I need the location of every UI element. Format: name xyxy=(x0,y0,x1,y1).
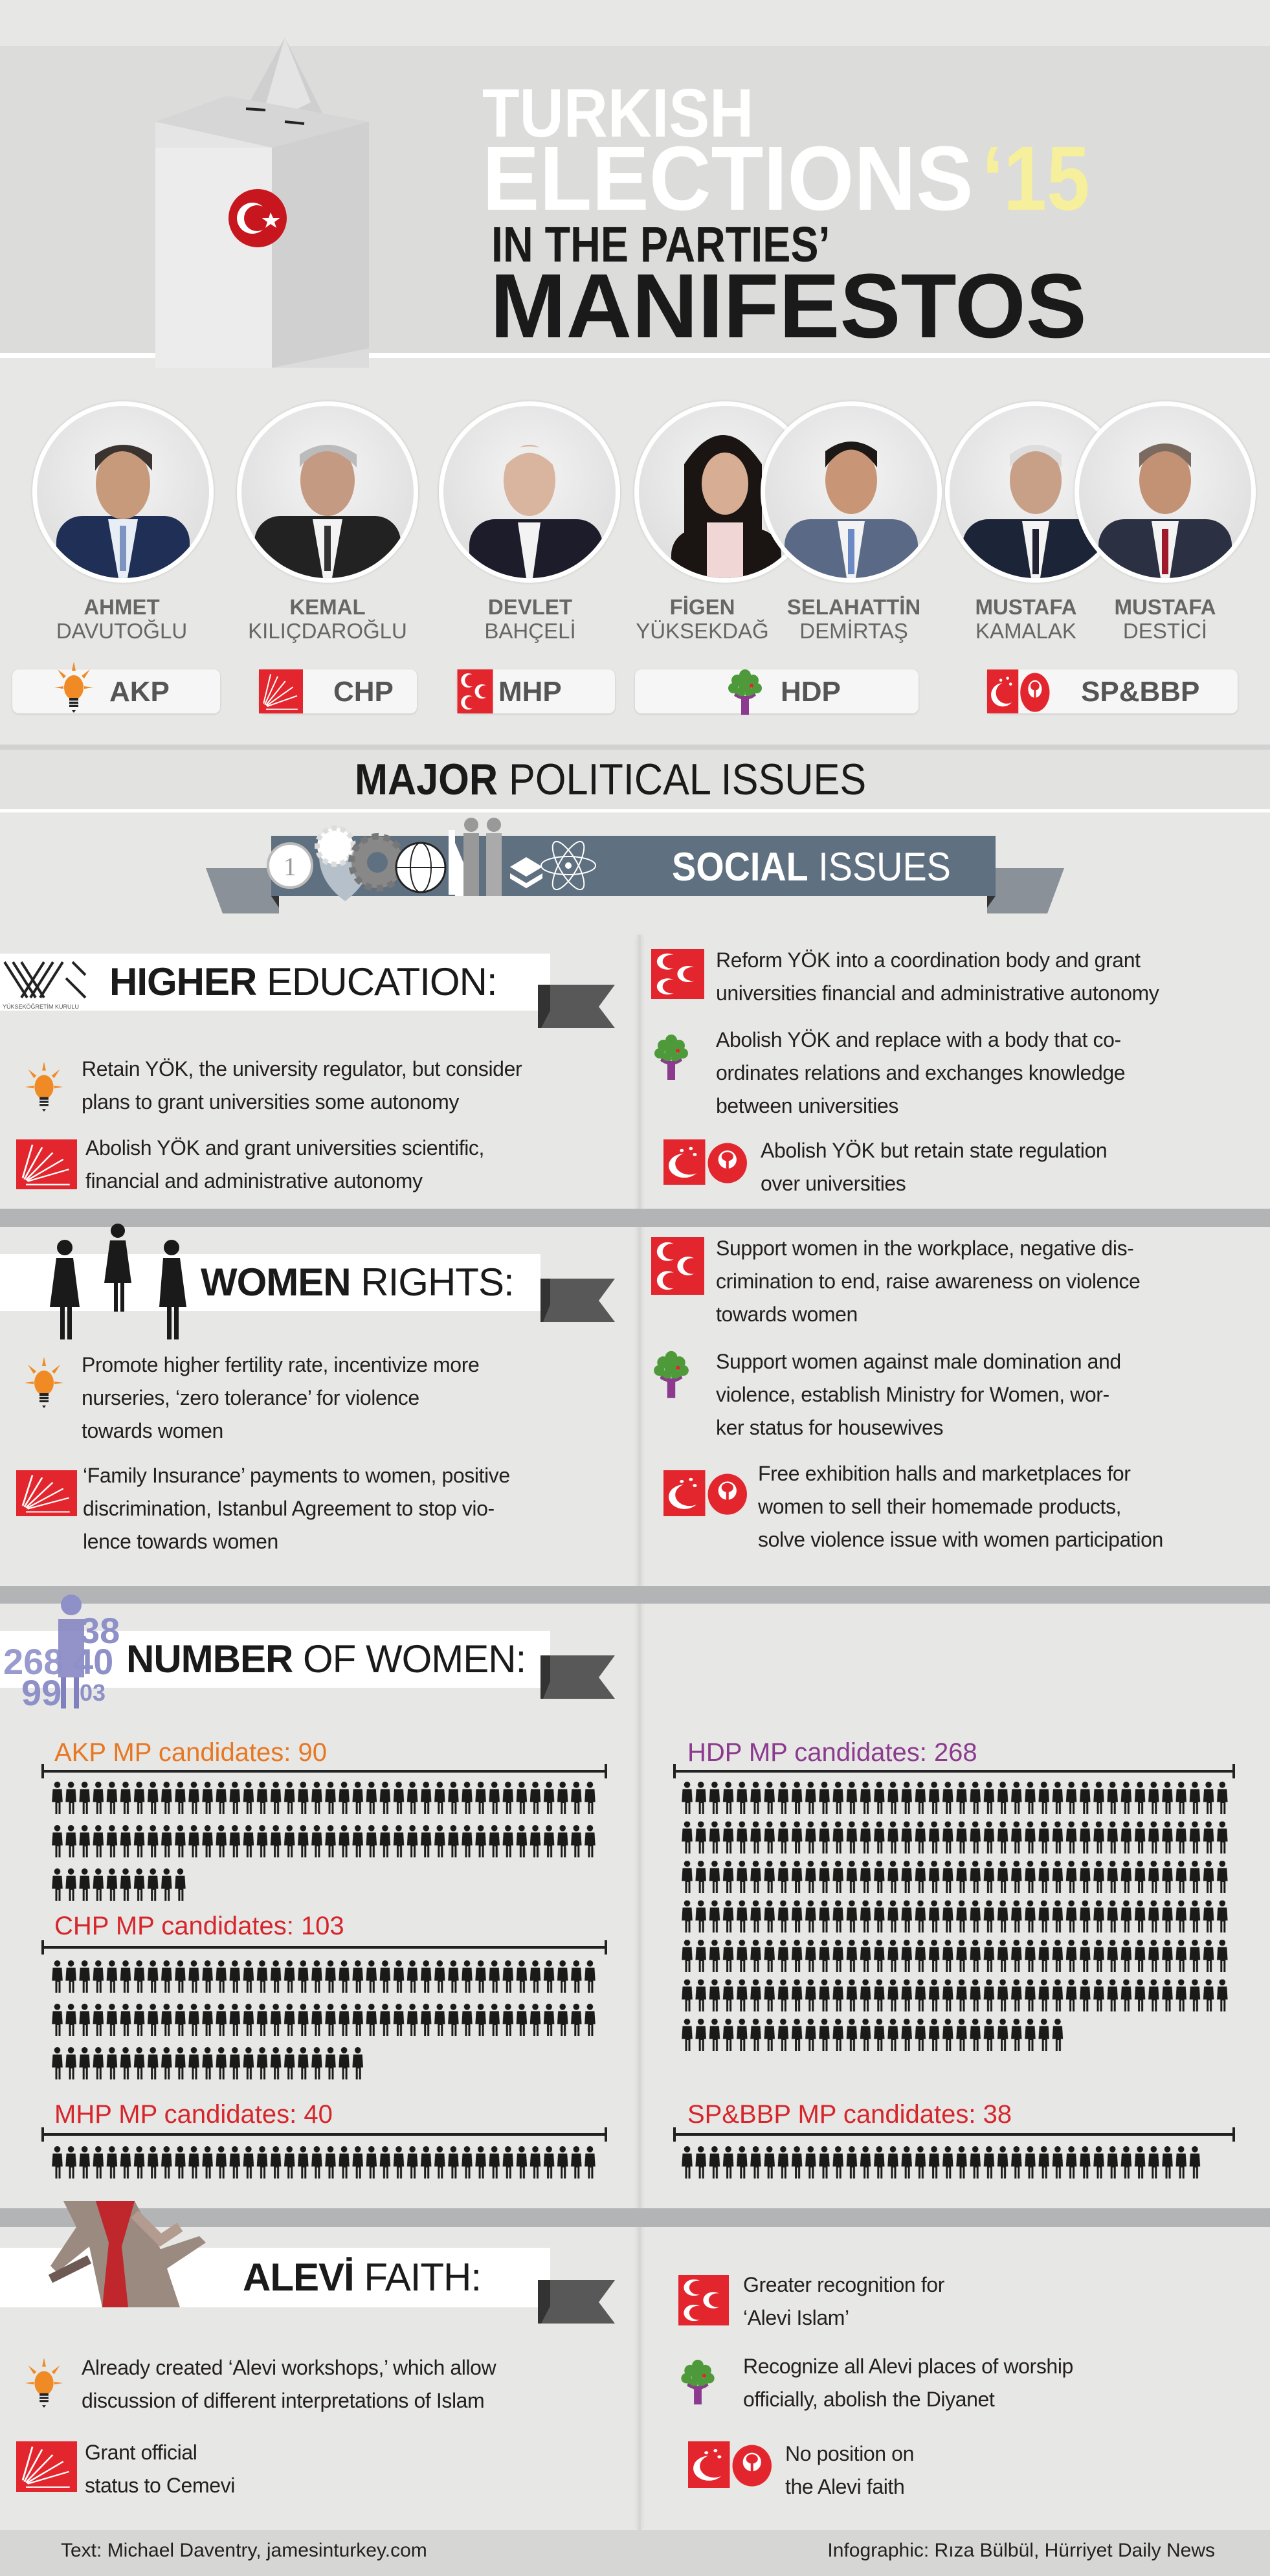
panel: number of women xyxy=(0,1595,615,1713)
item: SP&BBP: over universities xyxy=(761,1172,906,1195)
item: AKP: plans to grant universities some autonomy xyxy=(82,1090,459,1114)
item: CHP xyxy=(16,1464,510,1553)
credit: infographic: Infographic: Rıza Bülbül, Hürriyet Daily News xyxy=(827,2540,1215,2561)
candidate photos xyxy=(32,401,214,583)
candidate names: DAVUTOĞLU xyxy=(56,619,187,643)
icon: numbers figure: 40 xyxy=(73,1641,113,1682)
chart: HDP 268: HDP MP candidates: 268 xyxy=(687,1738,977,1767)
label: MHP xyxy=(457,669,615,713)
item: HDP: between universities xyxy=(716,1094,898,1117)
chart: AKP 90 xyxy=(41,1738,607,1901)
item: HDP xyxy=(654,1350,1121,1439)
item: MHP xyxy=(651,948,1159,1005)
icon: numbers figure: 268 xyxy=(3,1641,63,1682)
panel: candidates: BAHÇELİ xyxy=(484,619,576,643)
candidate names: AHMET xyxy=(84,595,160,619)
item: HDP: ker status for housewives xyxy=(716,1416,943,1439)
panel: candidates: DESTİCİ xyxy=(1123,619,1207,643)
item: CHP: Abolish YÖK and grant universities scientific, xyxy=(85,1136,484,1159)
panel: women rights xyxy=(0,1224,1163,1553)
item: MHP: ‘Alevi Islam’ xyxy=(743,2306,849,2329)
icon: numbers figure: 03 xyxy=(80,1679,106,1706)
item: CHP: financial and administrative autonomy xyxy=(85,1169,423,1193)
item: CHP xyxy=(16,1136,484,1193)
panel: candidates: MUSTAFA xyxy=(1114,595,1216,619)
divider xyxy=(0,1209,1270,1227)
credit: text: Text: Michael Daventry, jamesinturkey.com xyxy=(61,2540,427,2561)
label: HDP xyxy=(635,669,919,713)
item: AKP: nurseries, ‘zero tolerance’ for violence xyxy=(82,1386,419,1409)
icon: YÖK logo: YÜKSEKÖĞRETİM KURULU xyxy=(3,1003,79,1010)
panel: candidates: FİGEN xyxy=(670,595,735,619)
panel: alevi faith xyxy=(0,2201,1073,2498)
chart: MHP 40 xyxy=(41,2100,607,2178)
header: number of women xyxy=(0,1631,550,1688)
item: MHP xyxy=(678,2273,944,2329)
header: higher education xyxy=(0,954,550,1011)
icon: women figures xyxy=(50,1224,186,1339)
item: CHP: discrimination, Istanbul Agreement to stop vio- xyxy=(83,1497,495,1520)
title: ELECTIONS xyxy=(482,127,973,229)
icon: ballot box xyxy=(155,38,369,368)
item: MHP: Reform YÖK into a coordination body and grant xyxy=(716,948,1141,972)
chart: HDP 268 xyxy=(673,1738,1235,2051)
label: SP&BBP xyxy=(987,669,1238,713)
footer xyxy=(0,2530,1270,2576)
item: AKP: Already created ‘Alevi workshops,’ which allow xyxy=(82,2356,496,2379)
item: SP&BBP: Free exhibition halls and marketplaces for xyxy=(758,1462,1130,1485)
panel: candidates: DEMİRTAŞ xyxy=(799,619,908,643)
item: HDP xyxy=(654,1028,1125,1117)
chart: SP&BBP 38: SP&BBP MP candidates: 38 xyxy=(687,2100,1012,2129)
label: HDP: HDP xyxy=(781,676,841,708)
item: SP&BBP xyxy=(663,1462,1163,1551)
panel: candidates: DEVLET xyxy=(488,595,572,619)
item: CHP: Grant official xyxy=(85,2441,197,2464)
item: SP&BBP: Abolish YÖK but retain state regulation xyxy=(761,1139,1107,1162)
item: MHP: universities financial and administrative autonomy xyxy=(716,981,1159,1005)
chart: SP&BBP 38 xyxy=(673,2100,1235,2178)
item: HDP xyxy=(681,2355,1073,2411)
item: SP&BBP: No position on xyxy=(785,2442,914,2465)
header: higher education: HIGHER EDUCATION: xyxy=(109,960,497,1003)
title xyxy=(482,75,1090,357)
label: AKP: AKP xyxy=(109,676,170,708)
panel: candidates: KEMAL xyxy=(289,595,366,619)
chart: AKP 90: AKP MP candidates: 90 xyxy=(54,1738,327,1767)
chart: MHP 40: MHP MP candidates: 40 xyxy=(54,2100,333,2129)
header background xyxy=(0,46,1270,353)
item: CHP xyxy=(16,2441,235,2497)
item: AKP: discussion of different interpretations of Islam xyxy=(82,2389,484,2412)
ribbon: social issues xyxy=(206,818,1064,913)
item: AKP xyxy=(25,2356,496,2412)
item: AKP: Retain YÖK, the university regulator, but consider xyxy=(82,1057,522,1081)
heading: major political issues: MAJOR POLITICAL ISSUES xyxy=(355,755,866,804)
divider xyxy=(0,2208,1270,2227)
item: SP&BBP: solve violence issue with women participation xyxy=(758,1528,1163,1551)
ribbon: social issues: SOCIAL ISSUES xyxy=(672,845,951,890)
icon: numbers figure: 99 xyxy=(21,1672,61,1713)
item: HDP: violence, establish Ministry for Women, wor- xyxy=(716,1383,1109,1406)
panel: candidates: KILIÇDAROĞLU xyxy=(248,619,407,643)
chart: CHP 103: CHP MP candidates: 103 xyxy=(54,1912,344,1940)
item: MHP: crimination to end, raise awareness on violence xyxy=(716,1270,1140,1293)
chart: CHP 103 xyxy=(41,1912,607,2079)
title: ‘15 xyxy=(982,127,1090,229)
item: AKP xyxy=(25,1353,479,1442)
item: HDP: Recognize all Alevi places of worship xyxy=(743,2355,1073,2378)
item: CHP: lence towards women xyxy=(83,1530,278,1553)
header: alevi faith: ALEVİ FAITH: xyxy=(243,2256,481,2299)
title: TURKISH xyxy=(482,75,753,151)
panel: candidates: KAMALAK xyxy=(975,619,1076,643)
label: MHP: MHP xyxy=(498,676,562,708)
header: women rights: WOMEN RIGHTS: xyxy=(201,1260,514,1304)
item: AKP: Promote higher fertility rate, incentivize more xyxy=(82,1353,479,1376)
column divider xyxy=(638,935,641,2530)
label: CHP: CHP xyxy=(333,676,394,708)
item: MHP xyxy=(651,1237,1140,1326)
ribbon: social issues: 1 xyxy=(284,852,296,881)
title: MANIFESTOS xyxy=(490,254,1087,357)
item: MHP: towards women xyxy=(716,1303,858,1326)
item: SP&BBP xyxy=(688,2441,914,2498)
candidate names xyxy=(56,595,187,643)
title: IN THE PARTIES’ xyxy=(491,217,830,273)
header: women rights xyxy=(0,1254,540,1311)
item: MHP: Support women in the workplace, negative dis- xyxy=(716,1237,1133,1260)
panel: candidates: MUSTAFA xyxy=(975,595,1077,619)
divider xyxy=(0,1586,1270,1604)
icon: YÖK logo xyxy=(3,961,87,1010)
band: major political issues xyxy=(0,745,1270,809)
item: CHP: ‘Family Insurance’ payments to women, positive xyxy=(83,1464,510,1487)
item: AKP xyxy=(25,1057,522,1114)
label: AKP xyxy=(12,669,220,713)
panel: higher education xyxy=(0,948,1159,1195)
icon: numbers figure: 38 xyxy=(80,1610,120,1651)
icon: numbers figure xyxy=(3,1595,120,1713)
icon: dancer xyxy=(48,2201,206,2307)
header: alevi faith xyxy=(0,2248,550,2307)
panel: candidates: SELAHATTİN xyxy=(787,595,920,619)
item: SP&BBP xyxy=(663,1139,1107,1195)
item: HDP: Abolish YÖK and replace with a body that co- xyxy=(716,1028,1121,1051)
item: HDP: Support women against male domination and xyxy=(716,1350,1121,1373)
label: SP&BBP: SP&BBP xyxy=(1081,676,1199,708)
item: HDP: officially, abolish the Diyanet xyxy=(743,2388,994,2411)
item: SP&BBP: the Alevi faith xyxy=(785,2475,904,2498)
header: number of women: NUMBER OF WOMEN: xyxy=(126,1637,526,1681)
item: HDP: ordinates relations and exchanges knowledge xyxy=(716,1061,1125,1084)
label: CHP xyxy=(259,669,417,713)
party labels xyxy=(12,662,1238,715)
item: AKP: towards women xyxy=(82,1419,223,1442)
item: SP&BBP: women to sell their homemade products, xyxy=(758,1495,1121,1518)
item: CHP: status to Cemevi xyxy=(85,2474,235,2497)
item: MHP: Greater recognition for xyxy=(743,2273,944,2296)
panel: candidates: YÜKSEKDAĞ xyxy=(636,619,769,643)
panel: candidates xyxy=(31,400,1257,643)
